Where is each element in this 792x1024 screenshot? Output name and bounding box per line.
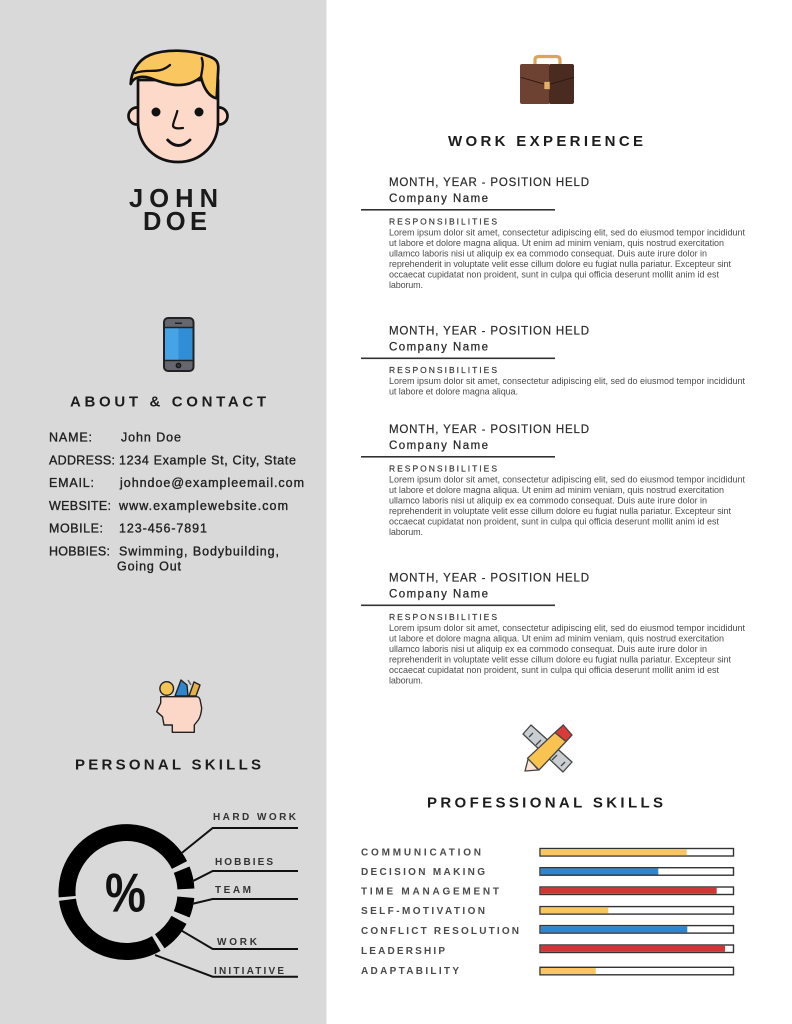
contact details: HOBBIES: xyxy=(49,544,110,558)
job entry 4 xyxy=(361,572,745,686)
skill: leadership xyxy=(361,945,734,957)
job entry 1: Company Name xyxy=(389,193,488,205)
job entry 3: occaecat cupidatat non proident, sunt in culpa qui officia deserunt mollit anim id est xyxy=(389,516,719,526)
chart: professional skills bars xyxy=(361,848,734,977)
skill: communication xyxy=(361,848,734,858)
label: initiative: INITIATIVE xyxy=(214,966,284,977)
icon: phone xyxy=(164,318,194,371)
icon: face avatar xyxy=(128,51,228,162)
job entry 3: laborum. xyxy=(389,527,423,537)
contact details: ADDRESS: xyxy=(49,454,115,468)
contact details: www.examplewebsite.com xyxy=(118,499,288,513)
donut segment: initiative xyxy=(68,900,156,952)
contact details: MOBILE: xyxy=(49,522,103,536)
skill: decision making: DECISION MAKING xyxy=(361,867,485,878)
icon: head with tools xyxy=(157,680,202,732)
job entry 2: ut labore et dolore magna aliqua. xyxy=(389,386,518,396)
donut segment: hard work xyxy=(67,833,180,897)
skill: time management: TIME MANAGEMENT xyxy=(361,886,499,898)
job entry 1: ut labore et dolore magna aliqua. Ut enim ad minim veniam, quis nostrud exercitation xyxy=(389,238,724,248)
job entry 4: ut labore et dolore magna aliqua. Ut enim ad minim veniam, quis nostrud exercitation xyxy=(389,634,724,644)
heading: professional skills: PROFESSIONAL SKILLS xyxy=(427,794,663,812)
job entry 1: MONTH, YEAR - POSITION HELD xyxy=(389,177,589,189)
job entry 4: MONTH, YEAR - POSITION HELD xyxy=(389,572,589,584)
skill: adaptability: ADAPTABILITY xyxy=(361,966,459,977)
skill: self-motivation: SELF-MOTIVATION xyxy=(361,906,485,917)
skill: adaptability xyxy=(361,966,734,977)
job entry 4: occaecat cupidatat non proident, sunt in culpa qui officia deserunt mollit anim id est xyxy=(389,665,719,675)
icon: pencil and ruler xyxy=(523,725,572,772)
job entry 1: laborum. xyxy=(389,280,423,290)
panel: left sidebar xyxy=(0,0,326,1024)
job entry 3: ullamco laboris nisi ut aliquip ex ea commodo consequat. Duis aute irure dolor in xyxy=(389,496,707,506)
job entry 4: Lorem ipsum dolor sit amet, consectetur adipiscing elit, sed do eiusmod tempor incididunt xyxy=(389,623,745,633)
leader line: team xyxy=(192,899,298,904)
skill: self-motivation xyxy=(361,906,734,917)
skill: decision making xyxy=(361,867,734,878)
skill: leadership: LEADERSHIP xyxy=(361,946,445,957)
job entry 1: occaecat cupidatat non proident, sunt in culpa qui officia deserunt mollit anim id est xyxy=(389,270,719,280)
label: team: TEAM xyxy=(215,885,251,896)
donut segment: hobbies xyxy=(182,870,186,889)
job entry 1: reprehenderit in voluptate velit esse cillum dolore eu fugiat nulla pariatur. Excepteur sint xyxy=(389,259,731,269)
job entry 3: MONTH, YEAR - POSITION HELD xyxy=(389,424,589,436)
job entry 4: reprehenderit in voluptate velit esse cillum dolore eu fugiat nulla pariatur. Excepteur sint xyxy=(389,654,731,664)
skill: time management xyxy=(361,886,734,898)
name heading: JOHN xyxy=(129,185,218,213)
job entry 3: ut labore et dolore magna aliqua. Ut enim ad minim veniam, quis nostrud exercitation xyxy=(389,485,724,495)
job entry 1 xyxy=(361,177,745,290)
chart: personal skills donut xyxy=(67,812,298,977)
percent sign: % xyxy=(105,862,146,923)
label: work: WORK xyxy=(217,937,258,948)
label: hard work: HARD WORK xyxy=(213,812,297,823)
name heading xyxy=(129,185,218,236)
job entry 4: ullamco laboris nisi ut aliquip ex ea commodo consequat. Duis aute irure dolor in xyxy=(389,644,707,654)
contact details: WEBSITE: xyxy=(49,499,111,513)
heading: work experience: WORK EXPERIENCE xyxy=(448,133,643,150)
donut segment: team xyxy=(182,897,186,914)
contact details: johndoe@exampleemail.com xyxy=(119,476,304,490)
leader line: work xyxy=(182,931,298,949)
job entry 2: RESPONSIBILITIES xyxy=(389,365,497,375)
job entry 2 xyxy=(361,326,745,396)
job entry 2: Lorem ipsum dolor sit amet, consectetur adipiscing elit, sed do eiusmod tempor incididunt xyxy=(389,376,745,386)
job entry 4: RESPONSIBILITIES xyxy=(389,612,497,622)
donut segment: work xyxy=(160,920,179,941)
icon: briefcase xyxy=(520,56,574,104)
leader line: hobbies xyxy=(192,871,298,882)
job entry 1: Lorem ipsum dolor sit amet, consectetur adipiscing elit, sed do eiusmod tempor incididunt xyxy=(389,228,745,238)
skill: conflict resolution xyxy=(361,926,734,937)
contact details: Swimming, Bodybuilding, xyxy=(119,544,279,558)
job entry 2: Company Name xyxy=(389,342,488,354)
heading: personal skills: PERSONAL SKILLS xyxy=(75,756,261,774)
label: hobbies: HOBBIES xyxy=(215,857,273,868)
leader line: hard work xyxy=(182,828,298,853)
contact details: NAME: xyxy=(49,430,92,444)
name heading: DOE xyxy=(143,208,207,236)
job entry 1: RESPONSIBILITIES xyxy=(389,216,497,226)
job entry 3 xyxy=(361,424,745,537)
job entry 3: reprehenderit in voluptate velit esse cillum dolore eu fugiat nulla pariatur. Excepteur sint xyxy=(389,506,731,516)
contact details: EMAIL: xyxy=(49,476,94,490)
contact details: 123-456-7891 xyxy=(119,522,207,536)
job entry 3: Lorem ipsum dolor sit amet, consectetur adipiscing elit, sed do eiusmod tempor incididunt xyxy=(389,474,745,484)
job entry 1: ullamco laboris nisi ut aliquip ex ea commodo consequat. Duis aute irure dolor in xyxy=(389,248,707,258)
job entry 4: laborum. xyxy=(389,676,423,686)
leader line: initiative xyxy=(155,955,298,977)
skill: conflict resolution: CONFLICT RESOLUTION xyxy=(361,926,519,937)
heading: about and contact: ABOUT & CONTACT xyxy=(70,394,266,410)
contact details: Going Out xyxy=(117,560,182,574)
job entry 3: Company Name xyxy=(389,440,488,452)
contact details: 1234 Example St, City, State xyxy=(119,454,296,468)
contact details xyxy=(49,430,304,574)
job entry 2: MONTH, YEAR - POSITION HELD xyxy=(389,326,589,338)
skill: communication: COMMUNICATION xyxy=(361,848,481,858)
contact details: John Doe xyxy=(121,430,181,444)
job entry 3: RESPONSIBILITIES xyxy=(389,464,497,474)
job entry 4: Company Name xyxy=(389,588,488,600)
